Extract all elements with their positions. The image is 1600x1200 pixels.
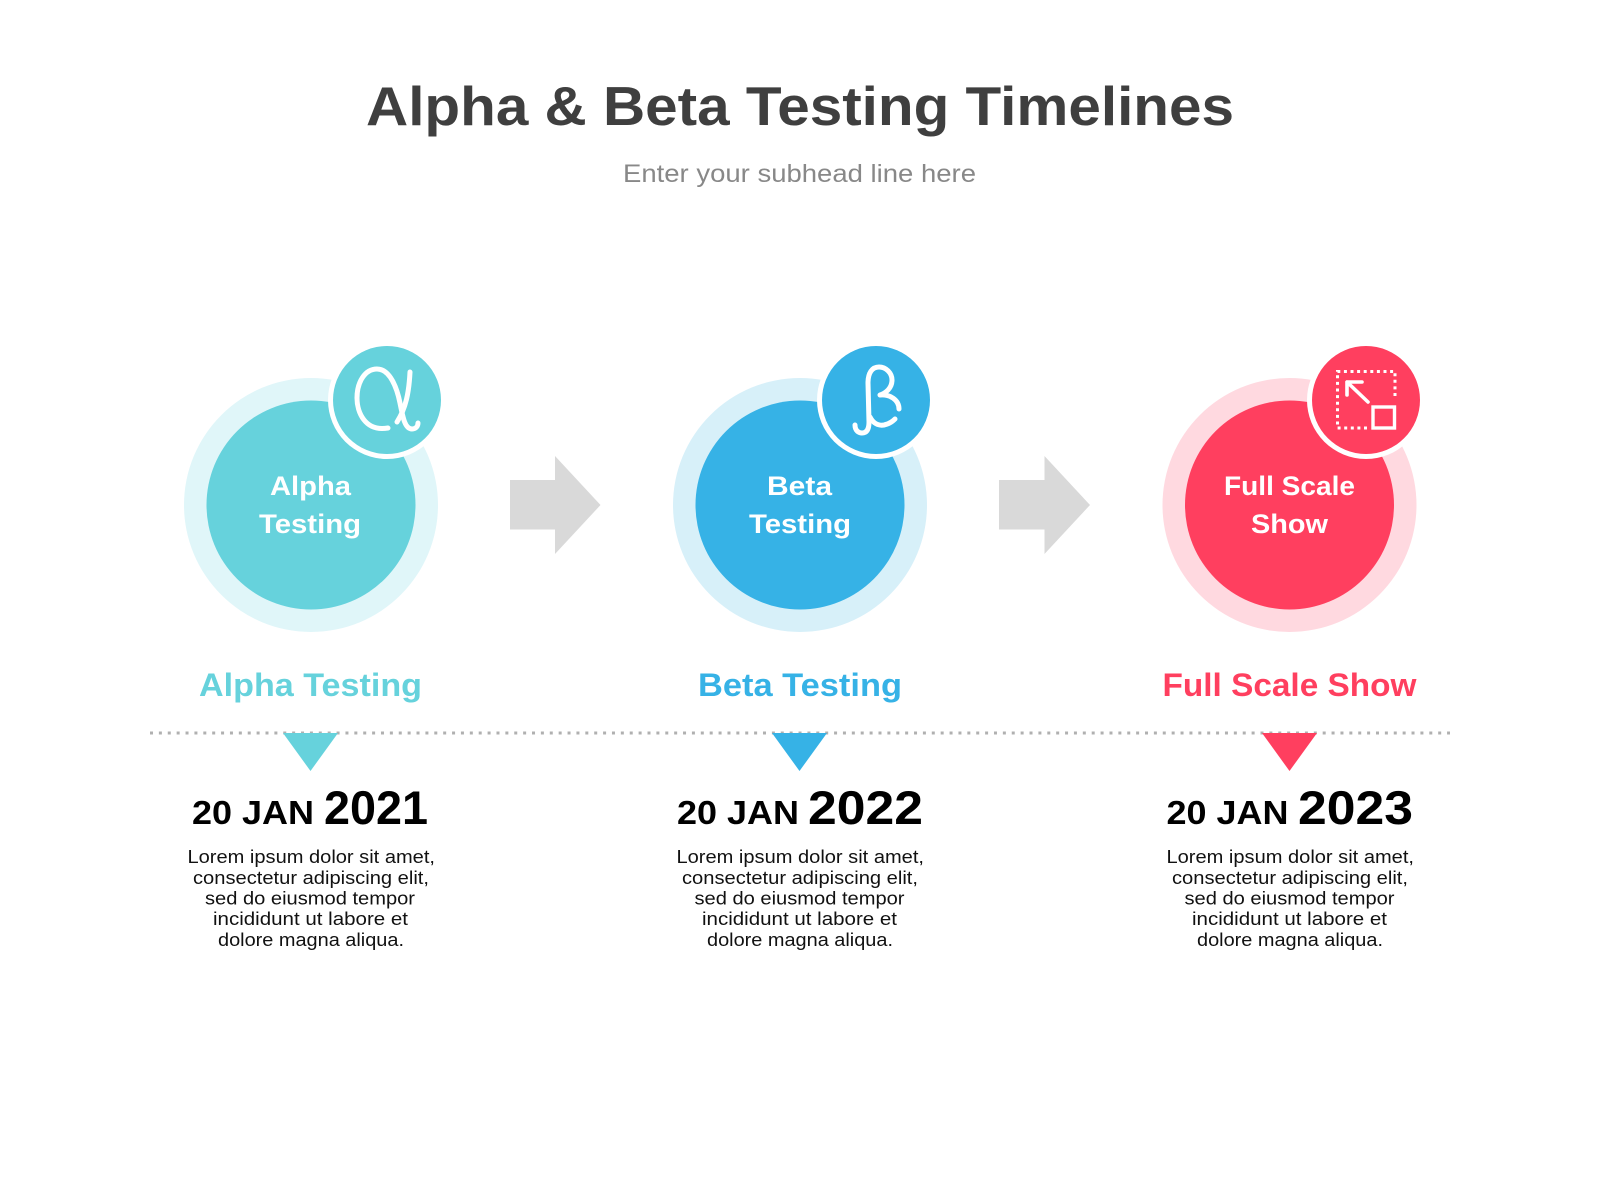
full scale description: dolore magna aliqua. — [1197, 930, 1383, 950]
full scale marker triangle — [1262, 733, 1317, 771]
icon: alpha badge — [328, 341, 446, 459]
title: Alpha & Beta Testing Timelines — [366, 75, 1234, 137]
beta description: sed do eiusmod tempor — [694, 888, 904, 908]
panel: alpha testing — [184, 341, 446, 950]
full scale date — [1166, 781, 1413, 834]
alpha date: 20 JAN — [192, 794, 314, 831]
beta circle label: Beta — [767, 471, 833, 501]
alpha description: incididunt ut labore et — [213, 909, 408, 929]
full scale outer ring — [1162, 378, 1416, 632]
arrow: alpha to beta — [510, 456, 600, 554]
beta date: 2022 — [808, 781, 923, 834]
alpha description: Lorem ipsum dolor sit amet, — [188, 847, 435, 867]
alpha date: 2021 — [324, 781, 428, 834]
alpha marker triangle — [283, 733, 338, 771]
panel: full scale show — [1162, 341, 1425, 950]
alpha description: dolore magna aliqua. — [218, 930, 404, 950]
beta description: incididunt ut labore et — [702, 909, 897, 929]
beta date — [677, 781, 923, 834]
beta description: Lorem ipsum dolor sit amet, — [676, 847, 924, 867]
full scale description — [1166, 847, 1414, 950]
full scale date: 20 JAN — [1166, 794, 1288, 831]
icon: expand badge — [1307, 341, 1425, 459]
beta marker triangle — [772, 733, 827, 771]
full scale description: sed do eiusmod tempor — [1184, 888, 1394, 908]
beta description — [676, 847, 924, 950]
beta heading: Beta Testing — [698, 667, 902, 703]
full scale description: Lorem ipsum dolor sit amet, — [1166, 847, 1414, 867]
full scale circle label — [1224, 471, 1355, 539]
panel: beta testing — [673, 341, 935, 950]
beta outer ring — [673, 378, 927, 632]
arrow: beta to full scale — [999, 456, 1090, 554]
alpha circle label: Testing — [259, 509, 361, 539]
icon: beta badge — [817, 341, 935, 459]
full scale circle label: Show — [1251, 509, 1329, 539]
alpha description — [188, 847, 435, 950]
alpha description: sed do eiusmod tempor — [205, 888, 415, 908]
full scale inner circle — [1185, 400, 1394, 610]
alpha description: consectetur adipiscing elit, — [193, 868, 429, 888]
alpha heading: Alpha Testing — [199, 667, 422, 703]
subhead: Enter your subhead line here — [623, 160, 976, 188]
beta circle label: Testing — [749, 509, 851, 539]
beta description: consectetur adipiscing elit, — [682, 868, 918, 888]
full scale description: consectetur adipiscing elit, — [1172, 868, 1408, 888]
beta circle label — [749, 471, 851, 539]
beta description: dolore magna aliqua. — [707, 930, 893, 950]
alpha inner circle — [206, 400, 416, 610]
alpha date — [192, 781, 428, 834]
full scale circle label: Full Scale — [1224, 471, 1355, 501]
full scale description: incididunt ut labore et — [1192, 909, 1387, 929]
beta inner circle — [696, 400, 904, 610]
alpha circle label: Alpha — [270, 471, 352, 501]
alpha outer ring — [184, 378, 438, 632]
full scale heading: Full Scale Show — [1162, 667, 1417, 703]
alpha circle label — [259, 471, 361, 539]
beta date: 20 JAN — [677, 794, 799, 831]
timeline dotted line — [150, 732, 1450, 734]
full scale date: 2023 — [1298, 781, 1413, 834]
